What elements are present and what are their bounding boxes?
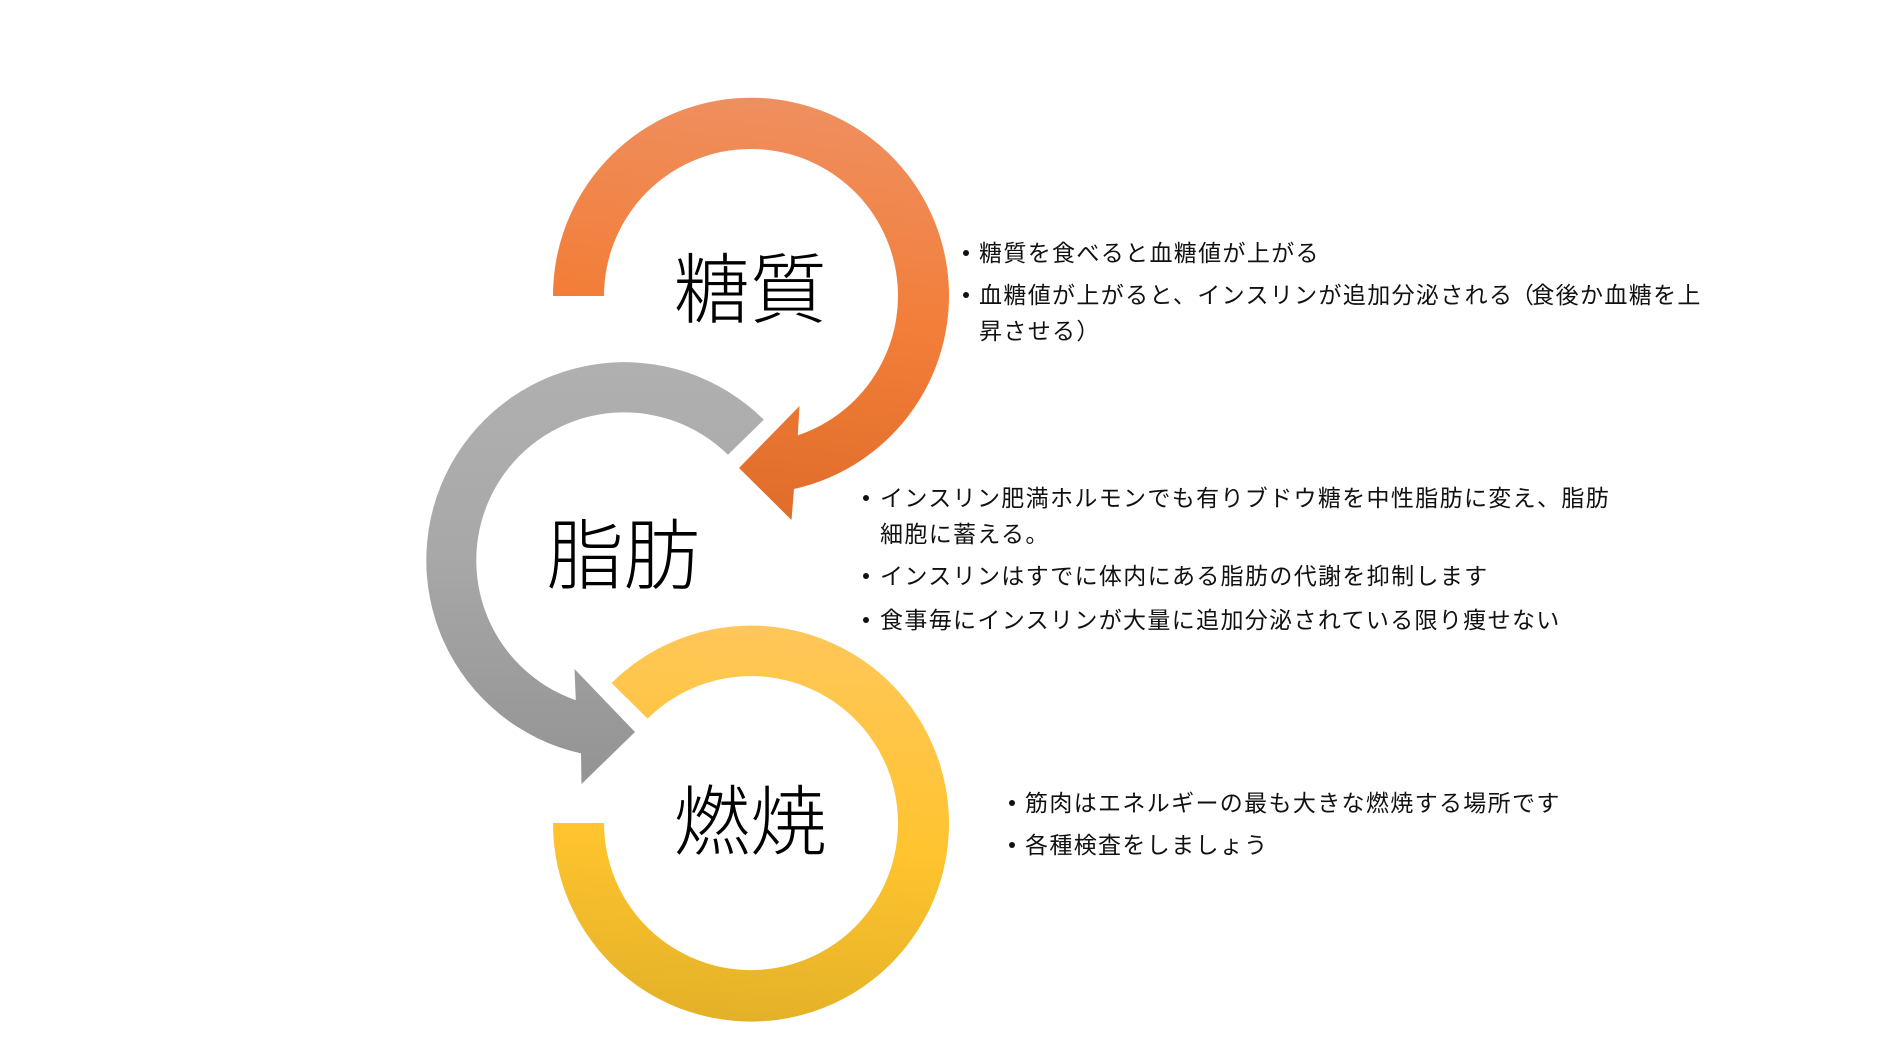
text block: 糖質 notes: 血糖値が上がると、インスリンが追加分泌される（食後か血糖を上 [979,282,1702,308]
text block: 糖質 notes: 糖質を食べると血糖値が上がる [979,240,1320,266]
text block: 脂肪 notes: 食事毎にインスリンが大量に追加分泌されている限り痩せない [880,607,1561,633]
text block: 燃焼 notes: 各種検査をしましょう [1025,832,1268,858]
text block: 燃焼 notes [1009,790,1561,858]
text block: 脂肪 notes: 細胞に蓄える。 [880,521,1050,547]
text block: 脂肪 notes [863,485,1610,633]
text block: 脂肪 notes: インスリン肥満ホルモンでも有りブドウ糖を中性脂肪に変え、脂肪 [880,485,1610,511]
text block: 糖質 notes: 昇させる） [979,318,1101,344]
arrow: gray ring 脂肪 [426,362,764,784]
label: 脂肪: 脂肪 [547,515,700,600]
label: 燃焼: 燃焼 [674,781,826,866]
arrow: yellow ring 燃焼 [553,626,949,1022]
text block: 脂肪 notes: インスリンはすでに体内にある脂肪の代謝を抑制します [880,563,1489,589]
label: 糖質: 糖質 [674,248,826,334]
text block: 糖質 notes [963,240,1702,344]
text block: 燃焼 notes: 筋肉はエネルギーの最も大きな燃焼する場所です [1025,790,1561,816]
arrow: orange ring 糖質 [553,98,949,520]
